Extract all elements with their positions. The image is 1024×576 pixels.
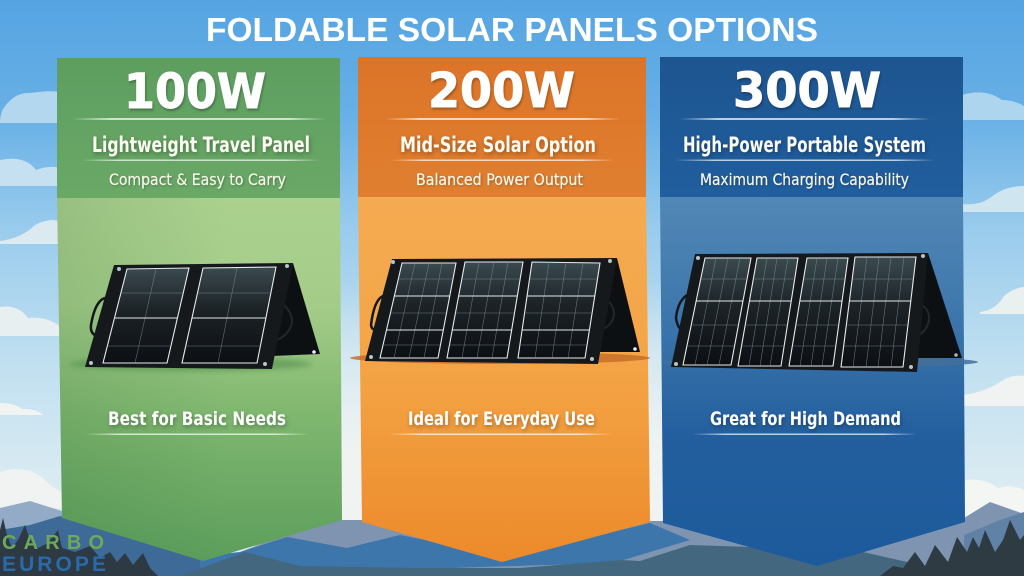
logo: Carbo Europe [2, 532, 106, 576]
solar panel: 4 sections [662, 253, 978, 372]
panel name: Mid-Size Solar Option [400, 133, 596, 157]
forest left [0, 518, 158, 576]
panel name: High-Power Portable System [683, 133, 926, 157]
panel: 300W [660, 57, 978, 566]
forest right [880, 520, 1024, 576]
panel description: Balanced Power Output [416, 170, 583, 189]
panel description: Maximum Charging Capability [700, 170, 909, 189]
solar panel: 2 sections [68, 263, 320, 371]
banner body [57, 196, 342, 561]
logo: Carbo Europe: CARBO [2, 532, 104, 554]
wattage heading: 100W [124, 64, 266, 120]
best-for label: Great for High Demand [710, 408, 901, 430]
wattage heading: 200W [428, 63, 575, 119]
banner header [57, 58, 340, 198]
logo: Carbo Europe: EUROPE [2, 553, 106, 576]
banner header [660, 57, 963, 197]
best-for label: Ideal for Everyday Use [408, 408, 595, 430]
mountains and forest [0, 501, 1024, 576]
panel: 200W [350, 57, 650, 562]
banner header [358, 57, 646, 197]
banner body [358, 195, 650, 562]
panel name: Lightweight Travel Panel [92, 133, 310, 157]
panel: 100W [57, 58, 342, 561]
title: FOLDABLE SOLAR PANELS OPTIONS [206, 11, 818, 48]
solar panel: 3 sections [350, 258, 650, 364]
best-for label: Best for Basic Needs [108, 408, 286, 430]
banner body [660, 195, 965, 566]
wattage heading: 300W [733, 63, 881, 119]
panel description: Compact & Easy to Carry [109, 170, 286, 189]
